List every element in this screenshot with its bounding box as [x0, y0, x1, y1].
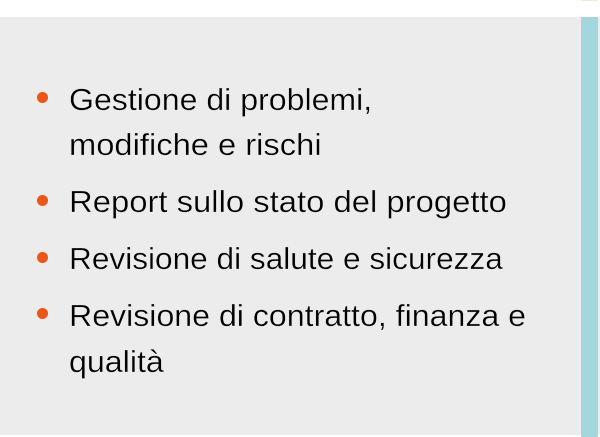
bullet 4 dot — [37, 308, 48, 319]
bullet 2 dot — [37, 195, 48, 206]
bullet list — [37, 83, 526, 379]
bullet 2 text: Report sullo stato del progetto — [69, 185, 507, 219]
top accent strip — [581, 0, 598, 1]
bullet 3 text: Revisione di salute e sicurezza — [69, 242, 503, 276]
bullet 1 text: Gestione di problemi, — [69, 83, 372, 117]
bullet 3 dot — [37, 252, 48, 263]
bullet 4 text line 2: qualità — [69, 345, 164, 379]
teal side bar — [581, 17, 598, 437]
bullet 1 text line 2: modifiche e rischi — [69, 128, 322, 162]
bullet 1 dot — [37, 92, 48, 103]
bullet 4 text: Revisione di contratto, finanza e — [69, 299, 526, 333]
